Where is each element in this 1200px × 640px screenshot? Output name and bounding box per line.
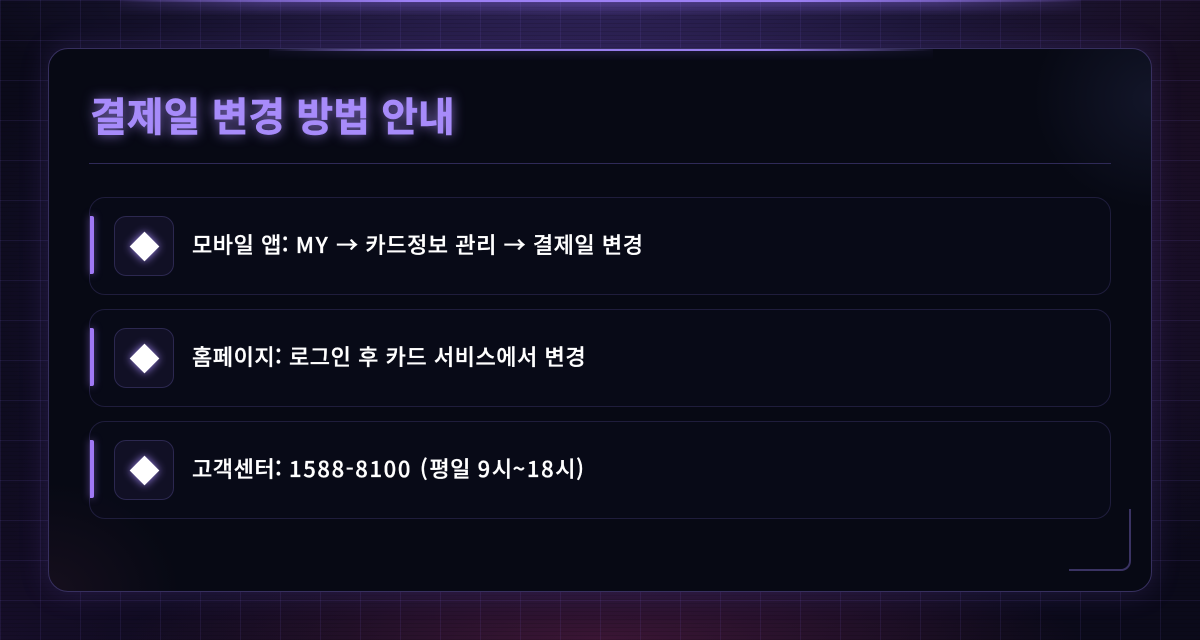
panel top glow bar [269, 49, 933, 51]
item: mobile app [89, 197, 1111, 295]
title: 결제일 변경 방법 안내 [90, 85, 455, 143]
text: customer center hours: 고객센터: 1588-8100 (평일 9시~18시) [192, 452, 586, 484]
panel: payment date change guide [48, 48, 1152, 592]
top glow bar [120, 0, 1080, 2]
item: customer center [89, 421, 1111, 519]
item: website [89, 309, 1111, 407]
text: mobile app steps: 모바일 앱: MY → 카드정보 관리 → 결제일 변경 [192, 228, 644, 260]
text: website steps: 홈페이지: 로그인 후 카드 서비스에서 변경 [192, 340, 586, 372]
corner bracket [1069, 509, 1131, 571]
icon: diamond [114, 216, 174, 276]
icon: diamond [114, 440, 174, 500]
icon: diamond [114, 328, 174, 388]
